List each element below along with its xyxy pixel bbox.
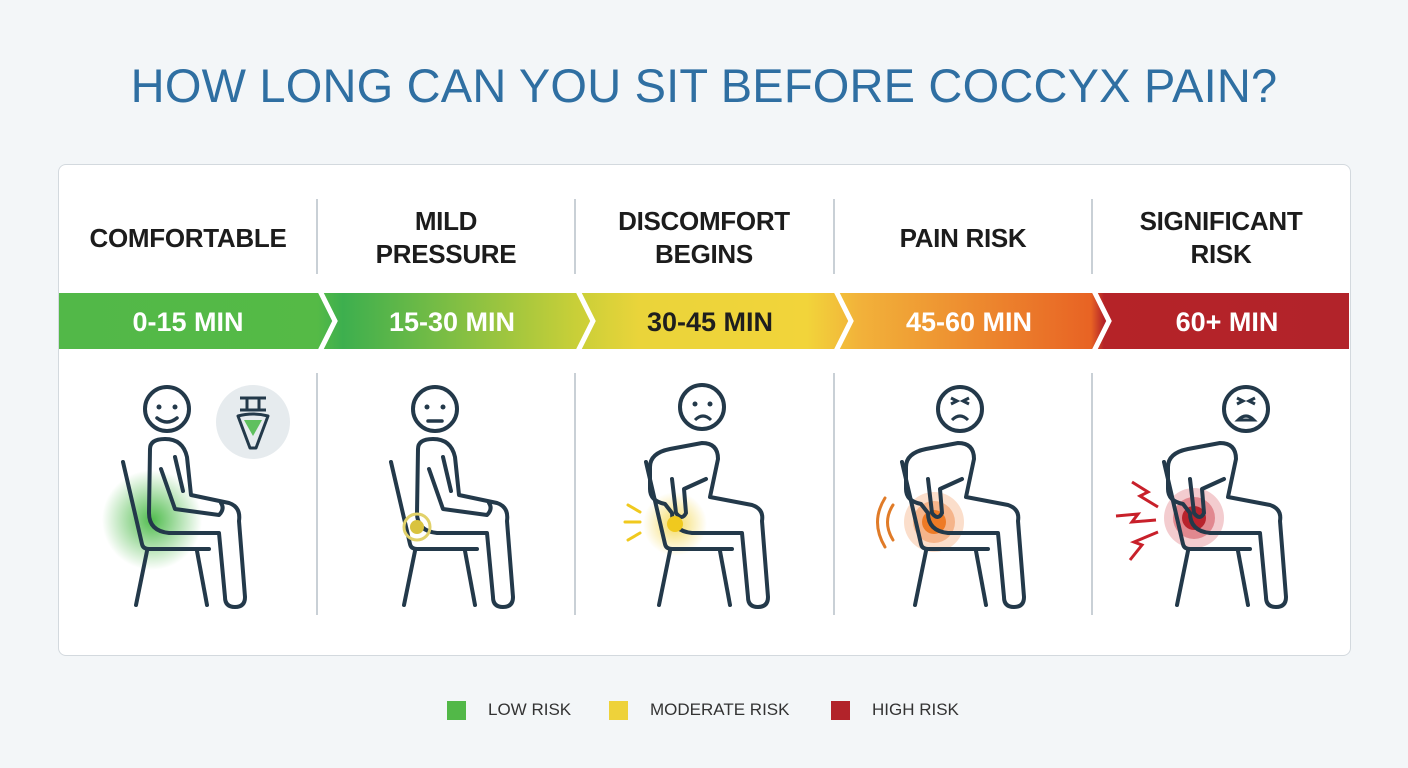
title: HOW LONG CAN YOU SIT BEFORE COCCYX PAIN?: [131, 59, 1277, 112]
text: 15-30 MIN: [389, 307, 515, 337]
figure 1: comfortable: [102, 385, 290, 607]
text: DISCOMFORT: [618, 206, 790, 236]
figure 5: significant risk: [1116, 387, 1286, 607]
legend: HIGH RISK: [872, 700, 959, 719]
legend: LOW RISK: [488, 700, 571, 719]
text: PAIN RISK: [900, 222, 1026, 252]
legend: MODERATE RISK: [650, 700, 789, 719]
figure 2: mild pressure: [391, 387, 513, 607]
timeline bar: [59, 291, 1349, 351]
text: 45-60 MIN: [906, 307, 1032, 337]
legend: [447, 700, 959, 720]
panel: timeline card: [58, 164, 1351, 656]
text: 30-45 MIN: [647, 307, 773, 337]
text: BEGINS: [655, 239, 753, 269]
headers: COMFORTABLE: [90, 222, 286, 252]
text: SIGNIFICANT: [1140, 206, 1302, 236]
icon: coccyx: [216, 385, 290, 459]
text: 60+ MIN: [1176, 307, 1278, 337]
figure 3: discomfort: [625, 385, 768, 607]
bar labels: 0-15 MIN: [132, 307, 244, 337]
text: MILD: [415, 206, 477, 236]
figure 4: pain risk: [878, 387, 1024, 607]
text: RISK: [1191, 239, 1251, 269]
text: PRESSURE: [376, 239, 516, 269]
